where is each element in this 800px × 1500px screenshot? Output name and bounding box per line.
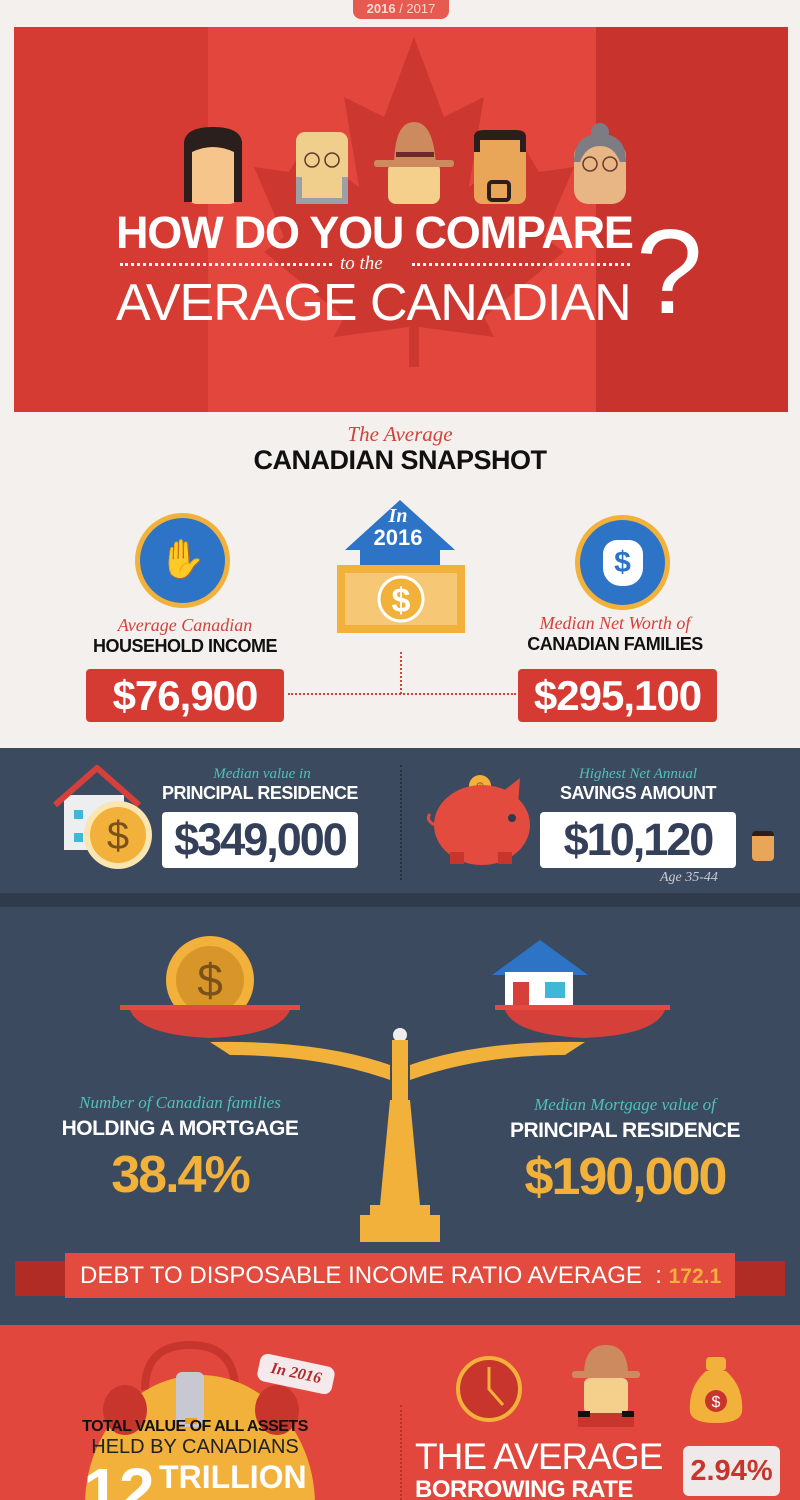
scale illustration [120,936,670,1242]
icon: house with bill [337,500,465,633]
icon: dollar bag: $ [712,1394,721,1411]
assets text: HELD BY CANADIANS [91,1436,299,1458]
assets text: TOTAL VALUE OF ALL ASSETS [82,1418,308,1435]
savings label and value: $10,120 [564,814,712,865]
mortgage holders [62,1093,298,1204]
income label: Average Canadian [118,615,252,635]
title: average canadian: AVERAGE CANADIAN [116,274,631,332]
header panel [14,27,788,412]
mortgage value [510,1095,740,1206]
icon: house with coin [53,765,152,869]
rate value: 2.94% [690,1455,773,1487]
net worth label [527,613,703,654]
icon: hand with cash [135,513,230,608]
mortgage holders: Number of Canadian families [79,1093,281,1112]
tag: in 2016 [256,1352,336,1396]
banner: debt ratio: DEBT TO DISPOSABLE INCOME RATIO AVERAGE : 172.1 [80,1262,721,1289]
year tab: 2016 / 2017 [367,1,435,16]
icon: house with bill: 2016 [374,525,422,550]
income value [86,669,284,722]
residence label and value: Median value in [213,766,311,782]
residence label and value: PRINCIPAL RESIDENCE [162,783,358,803]
borrowing rate text: THE AVERAGE [415,1436,662,1477]
tag: in 2016: In 2016 [269,1360,323,1387]
bottom red panel [0,1325,800,1500]
mortgage value: Median Mortgage value of [534,1095,716,1114]
net worth label: CANADIAN FAMILIES [527,634,703,654]
savings label and value [540,766,736,868]
subtitle: to the [120,253,630,274]
rate value [683,1446,780,1496]
banner: debt ratio [15,1253,785,1298]
mortgage holders: HOLDING A MORTGAGE [62,1117,298,1140]
icon: piggy bank: $ [476,779,484,795]
icon: money bag [575,515,670,610]
mortgage value: PRINCIPAL RESIDENCE [510,1119,740,1142]
icons: five faces [184,122,626,204]
assets text [82,1418,308,1500]
heading: snapshot: CANADIAN SNAPSHOT [253,445,546,475]
title: HOW DO YOU COMPARE [116,207,633,258]
income label: HOUSEHOLD INCOME [93,636,277,656]
residence label and value [162,766,358,868]
residence label and value: $349,000 [174,814,346,865]
question mark: ? [636,205,703,339]
icon: dollar bag [690,1357,742,1423]
mortgage holders: 38.4% [111,1146,249,1204]
savings label and value: SAVINGS AMOUNT [560,783,716,803]
year tab [353,0,449,19]
icon: maple leaf [254,38,574,367]
icon: piggy bank [426,775,530,865]
icon: house with coin: $ [107,814,129,858]
scale illustration: $ [197,954,223,1006]
net worth label: Median Net Worth of [540,613,690,633]
subtitle: to the: to the [340,253,383,274]
heading: snapshot: The Average [347,422,453,446]
borrowing rate text [415,1436,662,1500]
icon: house with bill: $ [392,582,411,620]
savings label and value: Highest Net Annual [579,766,697,782]
income value: $76,900 [113,672,257,719]
age note: Age 35-44 [660,870,718,885]
dark panel [0,748,800,1325]
icon: money bag: $ [614,546,631,579]
icon: house with bill: In [388,505,407,527]
icon: hand with cash: ✋ [159,539,206,581]
icon: mountie [572,1345,640,1427]
icon: small face [752,831,774,861]
income label [93,615,277,656]
heading: snapshot [253,422,547,475]
net worth value: $295,100 [534,672,701,719]
mortgage value: $190,000 [525,1148,725,1206]
icon: clock [456,1356,522,1422]
icon: asset bag [85,1341,315,1500]
